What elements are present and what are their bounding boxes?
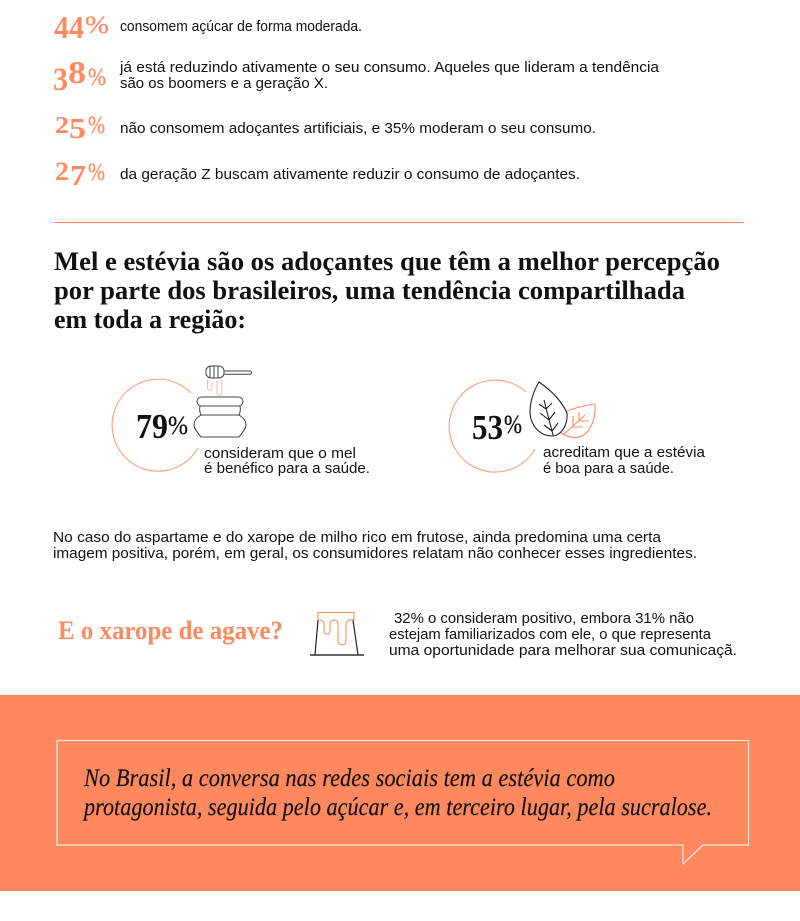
number: 53%: % [504,410,522,439]
stat: 25% no artificial sweeteners: não consomem adoçantes artificiais, e 35% moderam o seu consumo. [120,121,596,137]
text: agave syrup statistics: estejam familiarizados com ele, o que representa [389,627,712,643]
stat: 44% consume sugar moderately [54,9,362,45]
stat: 27% generation Z: 2 [55,157,69,186]
text: agave syrup statistics: uma oportunidade para melhorar sua comunicaçã. [389,643,737,659]
stat: 44% consume sugar moderately: 4 [69,9,84,45]
text: stevia is healthy: é boa para a saúde. [543,461,674,477]
stat: 27% generation Z [55,157,580,192]
quote text: No Brasil, a conversa nas redes sociais tem a estévia como [83,765,615,792]
heading: honey and stevia perception: em toda a região: [54,304,246,334]
stat: 38% actively reducing: 8 [68,54,86,90]
stat: 44% consume sugar moderately: % [85,12,109,39]
number: 79% [136,407,188,446]
icon: agave syrup container [310,612,364,655]
text: aspartame and corn syrup: imagem positiva, porém, em geral, os consumidores relatam não conhecer esses ingredientes. [53,546,697,562]
stat: 38% actively reducing [53,54,660,98]
text: honey is healthy: é benéfico para a saúde. [204,461,370,477]
stat: 38% actively reducing: % [88,64,106,91]
number: 79%: % [168,411,188,440]
stat: 25% no artificial sweeteners [55,112,596,145]
panel: stevia 53% [449,380,706,477]
text: honey is healthy [204,446,370,477]
number: 79%: 79 [136,407,168,446]
quote text: protagonista, seguida pelo açúcar e, em terceiro lugar, pela sucralose. [82,794,712,821]
number: 53%: 53 [472,408,503,447]
text: aspartame and corn syrup: No caso do aspartame e do xarope de milho rico em frutose, ainda predomina uma certa [53,530,662,546]
ring: honey percentage [112,379,198,471]
heading: honey and stevia perception: Mel e estévia são os adoçantes que têm a melhor percepção [54,246,720,276]
heading: honey and stevia perception [54,246,720,334]
stat: 25% no artificial sweeteners: 2 [55,113,69,139]
stat: 38% actively reducing: 3 [53,62,68,98]
text: stevia is healthy [543,445,706,477]
heading: honey and stevia perception: por parte dos brasileiros, uma tendência compartilhada [54,275,685,305]
text: stevia is healthy: acreditam que a estévia [543,445,706,461]
stat: 38% actively reducing: já está reduzindo ativamente o seu consumo. Aqueles que lideram a tendência [119,60,660,76]
stat: 44% consume sugar moderately: consomem açúcar de forma moderada. [120,19,362,35]
ring: stevia percentage [449,380,535,472]
heading: agave syrup question: E o xarope de agave? [58,616,283,645]
stat: 25% no artificial sweeteners: 5 [69,114,86,145]
quote text [82,765,712,821]
text: agave syrup statistics [389,611,737,659]
stat: 27% generation Z: da geração Z buscam ativamente reduzir o consumo de adoçantes. [120,167,580,183]
stat: 27% generation Z: 7 [70,161,86,192]
panel: orange quote band [0,695,800,891]
panel: honey 79% [112,366,370,477]
stat: 27% generation Z: % [88,159,105,186]
icon: stevia leaves [530,382,595,438]
stat: 38% actively reducing: são os boomers e a geração X. [120,76,328,92]
icon: honey pot with dipper [194,366,252,437]
text: honey is healthy: consideram que o mel [204,446,356,462]
stat: 44% consume sugar moderately: 4 [54,9,69,45]
text: agave syrup statistics: 32% o consideram positivo, embora 31% não [394,611,694,627]
text: aspartame and corn syrup [53,530,697,562]
stat: 25% no artificial sweeteners: % [88,112,105,139]
speech bubble outline [57,740,748,864]
